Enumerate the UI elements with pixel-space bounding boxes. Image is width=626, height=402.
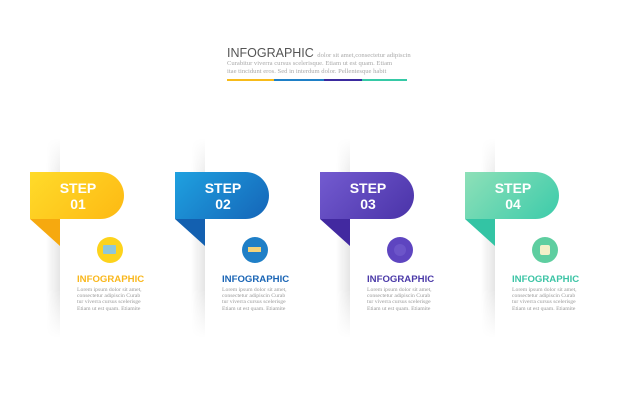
tab step 02 [175, 172, 269, 219]
tab step 04 [465, 172, 559, 219]
tab step 04: STEP [495, 180, 531, 196]
tab step 01: STEP [60, 180, 96, 196]
title: INFOGRAPHIC [222, 274, 289, 285]
text: tur viverra cursus scelerisge [222, 299, 286, 305]
text [367, 287, 432, 312]
text [512, 287, 577, 312]
tab step 03 [320, 172, 414, 219]
tab step 02: 02 [215, 196, 231, 212]
header text: Curabitur viverra cursus scelerisque. Etiam ut est quam. Etiam [227, 60, 392, 67]
text [77, 287, 142, 312]
text: tur viverra cursus scelerisge [77, 299, 141, 305]
panel: step 4 [465, 154, 579, 322]
panel: step 3 [320, 154, 434, 322]
text: Etiam ut est quam. Etiamite [512, 306, 575, 312]
text: Lorem ipsum dolor sit amet, [77, 287, 142, 293]
title: INFOGRAPHIC [512, 274, 579, 285]
header text [227, 60, 392, 74]
tab step 04: 04 [505, 196, 521, 212]
icon [242, 237, 268, 263]
icon: card [97, 237, 123, 263]
color bar [227, 79, 407, 81]
panel: step 1 [30, 154, 144, 322]
text: Lorem ipsum dolor sit amet, [367, 287, 432, 293]
title: INFOGRAPHIC [367, 274, 434, 285]
tab step 03: STEP [350, 180, 386, 196]
text: consectetur adipiscin Curab [367, 293, 430, 299]
text: Etiam ut est quam. Etiamite [77, 306, 140, 312]
text: Lorem ipsum dolor sit amet, [222, 287, 287, 293]
text: Lorem ipsum dolor sit amet, [512, 287, 577, 293]
text [222, 287, 287, 312]
header text: itae tincidunt eros. Sed in interdum dolor. Pellentesque habit [227, 68, 386, 74]
icon: clock [387, 237, 413, 263]
tab step 01 [30, 172, 124, 219]
text: tur viverra cursus scelerisge [367, 299, 431, 305]
text: consectetur adipiscin Curab [77, 293, 140, 299]
tab step 01: 01 [70, 196, 86, 212]
tab step 03: 03 [360, 196, 376, 212]
text: consectetur adipiscin Curab [512, 293, 575, 299]
text: Etiam ut est quam. Etiamite [367, 306, 430, 312]
header title: INFOGRAPHIC dolor sit amet,consectetur adipiscin [227, 46, 411, 60]
icon [532, 237, 558, 263]
header [227, 46, 411, 81]
text: tur viverra cursus scelerisge [512, 299, 576, 305]
panel: step 2 [175, 154, 289, 322]
text: consectetur adipiscin Curab [222, 293, 285, 299]
text: Etiam ut est quam. Etiamite [222, 306, 285, 312]
title: INFOGRAPHIC [77, 274, 144, 285]
tab step 02: STEP [205, 180, 241, 196]
